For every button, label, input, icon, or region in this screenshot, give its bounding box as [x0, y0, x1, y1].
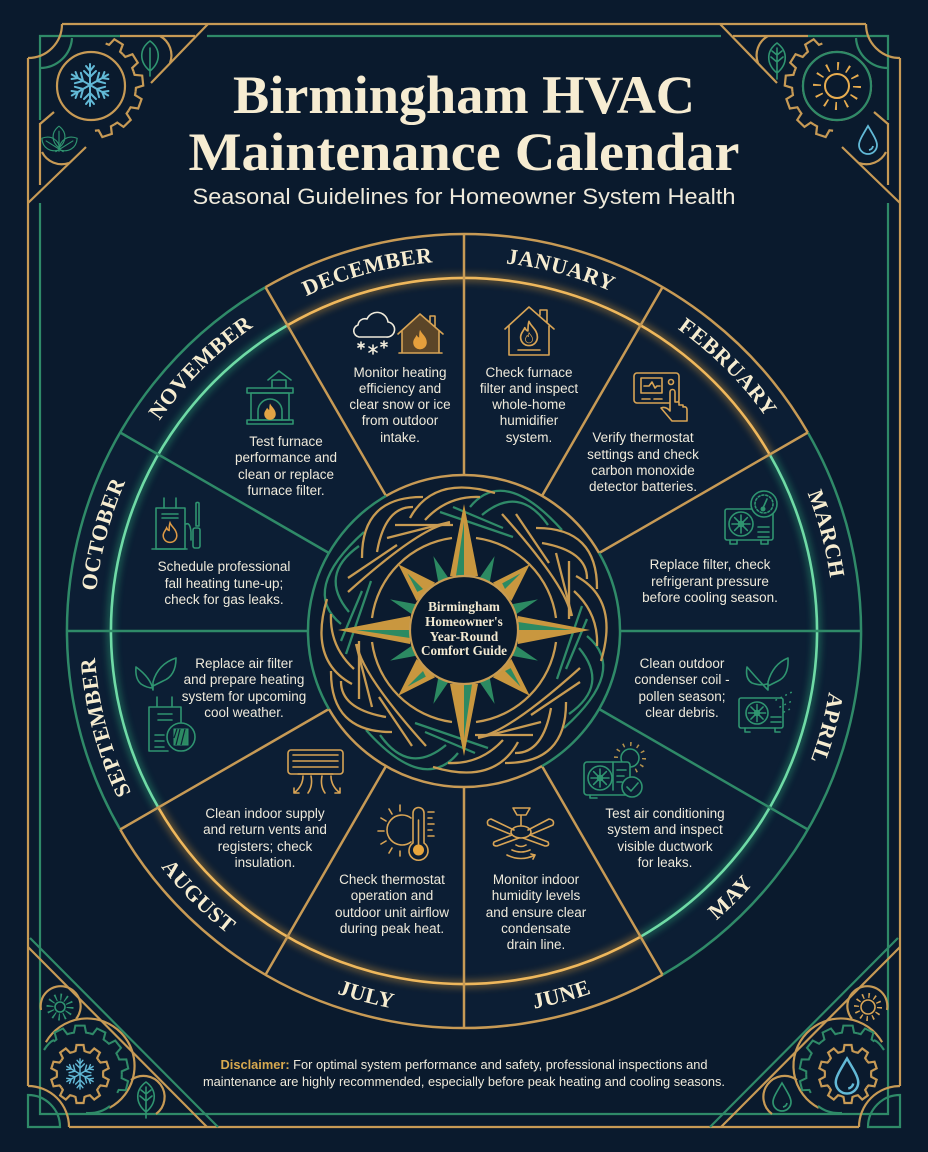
month labels: [81, 248, 844, 1008]
icon: leaves and filter: [136, 658, 195, 751]
text: September: cool weather.: [204, 705, 284, 720]
text: November: clean or replace: [238, 467, 334, 482]
text: November: furnace filter.: [247, 483, 325, 498]
panel: September: [136, 656, 306, 751]
icon: thermostat with hand: [634, 373, 687, 421]
text: June: condensate: [501, 921, 571, 936]
month labels: APRIL: [811, 692, 842, 761]
text: March: refrigerant pressure: [651, 574, 769, 589]
subtitle: Seasonal Guidelines for Homeowner System Health: [192, 184, 736, 209]
text: July: Check thermostat: [339, 872, 445, 887]
text: January: whole-home: [491, 397, 566, 412]
month labels: JULY: [338, 981, 395, 1008]
outer ring: [67, 234, 861, 1028]
text: May: system and inspect: [607, 822, 723, 837]
ring: [308, 475, 620, 787]
center medallion: [308, 475, 620, 787]
center text: [421, 599, 507, 658]
spokes: [67, 234, 861, 1028]
text: November: [235, 434, 337, 498]
corner: top left snowflake gear: [28, 24, 208, 203]
text: July: [335, 872, 449, 936]
text: December: clear snow or ice: [349, 397, 451, 412]
calendar wheel: [66, 232, 862, 1030]
month labels: OCTOBER: [82, 480, 126, 590]
month labels: DECEMBER: [300, 248, 433, 296]
text: January: humidifier: [500, 413, 559, 428]
icon: leaves and condenser: [739, 658, 794, 732]
text: June: Monitor indoor: [493, 872, 580, 887]
month labels: FEBRUARY: [678, 317, 778, 414]
text: May: [605, 806, 725, 870]
glow ring: [111, 278, 817, 984]
text: September: [182, 656, 306, 720]
panel: August: [203, 750, 343, 870]
text: October: [158, 559, 290, 607]
icon: AC unit with sun and check: [584, 744, 644, 798]
text: January: filter and inspect: [480, 381, 578, 396]
text: August: and return vents and: [203, 822, 327, 837]
center text: Birmingham: [428, 599, 500, 614]
panel: July: [335, 805, 449, 936]
text: April: Clean outdoor: [640, 656, 725, 671]
text: February: settings and check: [587, 447, 699, 462]
text: April: condenser coil -: [634, 672, 730, 687]
text: September: Replace air filter: [195, 656, 293, 671]
text: November: Test furnace: [249, 434, 323, 449]
text: October: fall heating tune-up;: [165, 576, 283, 591]
center text: Year-Round: [430, 629, 499, 644]
icon: house with flame: [505, 307, 554, 355]
text: August: [203, 806, 327, 870]
text: April: pollen season;: [638, 689, 726, 704]
text: May: for leaks.: [638, 855, 692, 870]
icon: sun and thermometer: [378, 805, 434, 860]
panel: January: [480, 307, 578, 445]
icon: ceiling fan: [487, 808, 554, 859]
text: February: carbon monoxide: [591, 463, 695, 478]
text: June: and ensure clear: [486, 905, 587, 920]
icon: fireplace: [247, 371, 293, 424]
text: August: registers; check: [218, 839, 313, 854]
disclaimer: [203, 1058, 725, 1089]
text: March: before cooling season.: [642, 590, 778, 605]
panel: October: [152, 498, 290, 607]
panel: February: [587, 373, 699, 494]
text: February: Verify thermostat: [592, 430, 694, 445]
title: Maintenance Calendar: [188, 122, 740, 182]
text: August: insulation.: [235, 855, 295, 870]
icon: outdoor unit with gauge: [725, 491, 777, 544]
text: December: Monitor heating: [353, 365, 447, 380]
text: July: operation and: [351, 888, 433, 903]
text: August: Clean indoor supply: [205, 806, 325, 821]
text: January: [480, 365, 578, 445]
text: May: visible ductwork: [617, 839, 713, 854]
text: December: from outdoor: [362, 413, 439, 428]
text: January: system.: [506, 430, 552, 445]
month labels: MAY: [707, 874, 750, 920]
panel: December: [349, 312, 451, 445]
panel: November: [235, 371, 337, 498]
text: April: [634, 656, 730, 720]
month labels: NOVEMBER: [148, 318, 254, 420]
month labels: JANUARY: [506, 250, 616, 290]
text: February: [587, 430, 699, 494]
corner: top right sun gear: [720, 24, 900, 203]
text: December: efficiency and: [359, 381, 441, 396]
icon: furnace with flame and tool: [152, 498, 200, 549]
corner: bottom left snowflake gear: [28, 938, 218, 1127]
text: September: and prepare heating: [184, 672, 304, 687]
icon: cloud, snow and house: [354, 312, 443, 354]
text: April: clear debris.: [645, 705, 719, 720]
text: June: [486, 872, 587, 952]
text: September: system for upcoming: [182, 689, 306, 704]
text: November: performance and: [235, 450, 337, 465]
text: February: detector batteries.: [589, 479, 697, 494]
month labels: JUNE: [534, 980, 590, 1008]
text: June: drain line.: [507, 937, 565, 952]
text: June: humidity levels: [492, 888, 581, 903]
panel: June: [486, 808, 587, 952]
text: October: Schedule professional: [158, 559, 290, 574]
text: October: check for gas leaks.: [164, 592, 284, 607]
icon: air vent: [288, 750, 343, 793]
title: [188, 65, 740, 182]
center text: Homeowner's: [425, 614, 503, 629]
text: July: outdoor unit airflow: [335, 905, 449, 920]
text: March: [642, 557, 778, 605]
month labels: SEPTEMBER: [81, 658, 130, 797]
woven knot: [321, 487, 607, 773]
title: Birmingham HVAC: [233, 65, 695, 125]
text: December: [349, 365, 451, 445]
text: December: intake.: [380, 430, 420, 445]
center text: Comfort Guide: [421, 643, 507, 658]
text: January: Check furnace: [485, 365, 573, 380]
disclaimer: maintenance are highly recommended, especially before peak heating and cooling seasons.: [203, 1075, 725, 1089]
text: March: Replace filter, check: [650, 557, 771, 572]
disclaimer: Disclaimer: For optimal system performance and safety, professional inspections and: [220, 1058, 708, 1072]
compass star: [338, 504, 590, 756]
month labels: AUGUST: [161, 862, 236, 932]
corner: bottom right water gear: [710, 938, 900, 1127]
panel: March: [642, 491, 778, 605]
panel: May: [584, 744, 725, 870]
text: May: Test air conditioning: [605, 806, 725, 821]
panel: April: [634, 656, 794, 732]
text: July: during peak heat.: [340, 921, 444, 936]
month labels: MARCH: [808, 488, 844, 578]
